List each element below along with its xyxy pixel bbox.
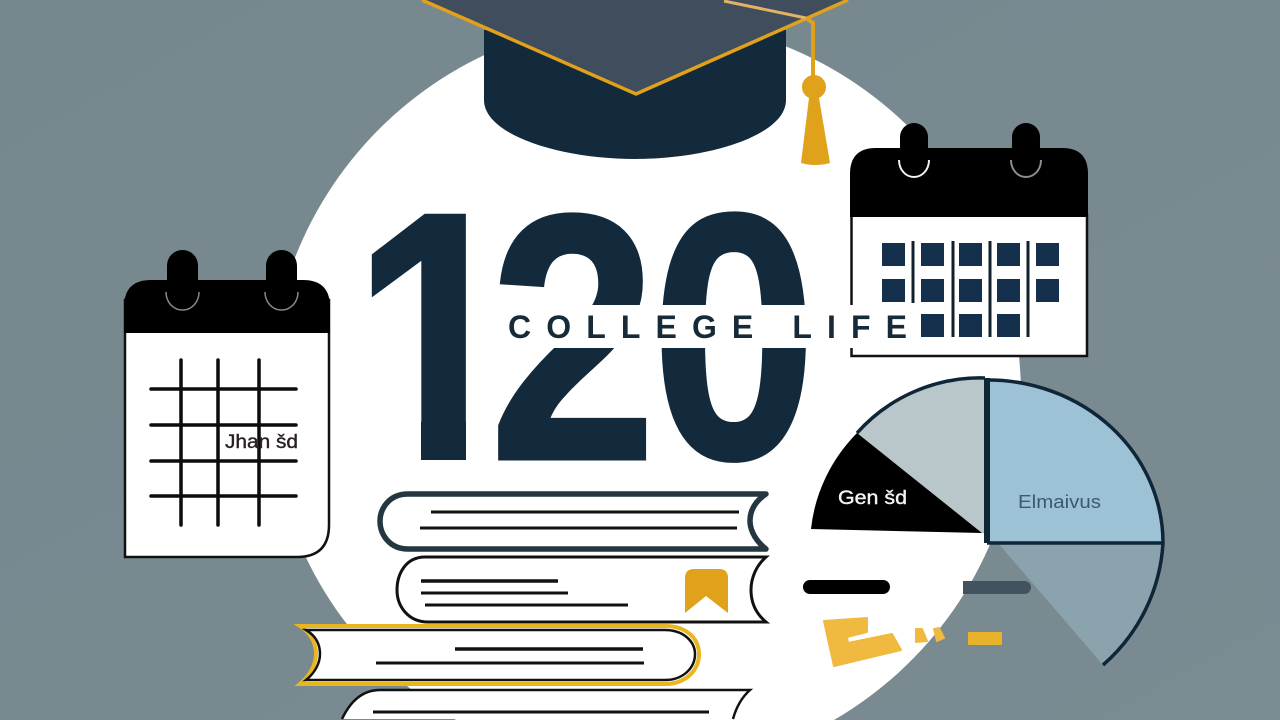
calendar page xyxy=(852,215,1087,356)
board edges xyxy=(422,0,848,94)
small blobs xyxy=(916,629,927,642)
icon: calendar right xyxy=(850,123,1088,356)
book 3 xyxy=(300,626,699,684)
yellow fragments xyxy=(824,618,1001,666)
digit 1: 1 xyxy=(353,138,520,536)
pie outlines xyxy=(857,378,1163,665)
title band with college life xyxy=(495,305,919,348)
title text: COLLEGE LIFE xyxy=(508,309,907,345)
bar track white xyxy=(880,581,963,594)
slice: lower right xyxy=(998,543,1163,665)
digit 2: 2 xyxy=(489,143,657,534)
icon: graduation cap xyxy=(422,0,848,165)
pie chart xyxy=(811,378,1163,665)
progress bar xyxy=(803,580,1031,594)
book 1 xyxy=(380,494,766,549)
column dividers xyxy=(913,241,1028,337)
calendar page xyxy=(125,300,329,557)
icon: calendar left xyxy=(124,250,330,557)
bar fill xyxy=(803,580,890,594)
book 4 xyxy=(342,690,750,719)
tassel xyxy=(801,98,830,165)
grid lines xyxy=(151,360,296,525)
ring right xyxy=(265,250,298,310)
ring left xyxy=(899,123,929,177)
cap band xyxy=(484,30,786,159)
bookmark xyxy=(685,569,728,613)
digit 0: 0 xyxy=(651,141,817,533)
slice: top left grey xyxy=(857,378,985,533)
big number 120 xyxy=(372,211,806,463)
ring left xyxy=(166,250,199,310)
small bar xyxy=(969,633,1001,644)
cap board xyxy=(422,0,848,94)
ring right xyxy=(1011,123,1041,177)
calendar header xyxy=(124,280,330,333)
book 2 xyxy=(397,557,766,622)
tassel knob xyxy=(802,75,826,99)
title backing band xyxy=(495,305,919,348)
white central circle xyxy=(269,19,1021,720)
date squares xyxy=(882,243,1059,337)
calendar header xyxy=(850,148,1088,217)
large bracket shape xyxy=(824,618,901,666)
calendar label: Jhan šd xyxy=(225,432,298,453)
icon: book stack xyxy=(300,494,766,719)
board highlight line xyxy=(724,1,806,18)
slice label: electives: Elmaivus xyxy=(1018,492,1101,512)
slice: blue electives xyxy=(988,381,1163,543)
slice label: gen ed: Gen šd xyxy=(838,488,907,509)
bar track dark xyxy=(940,581,1031,594)
tassel cord xyxy=(806,18,813,76)
slice: black gen ed xyxy=(811,433,982,533)
